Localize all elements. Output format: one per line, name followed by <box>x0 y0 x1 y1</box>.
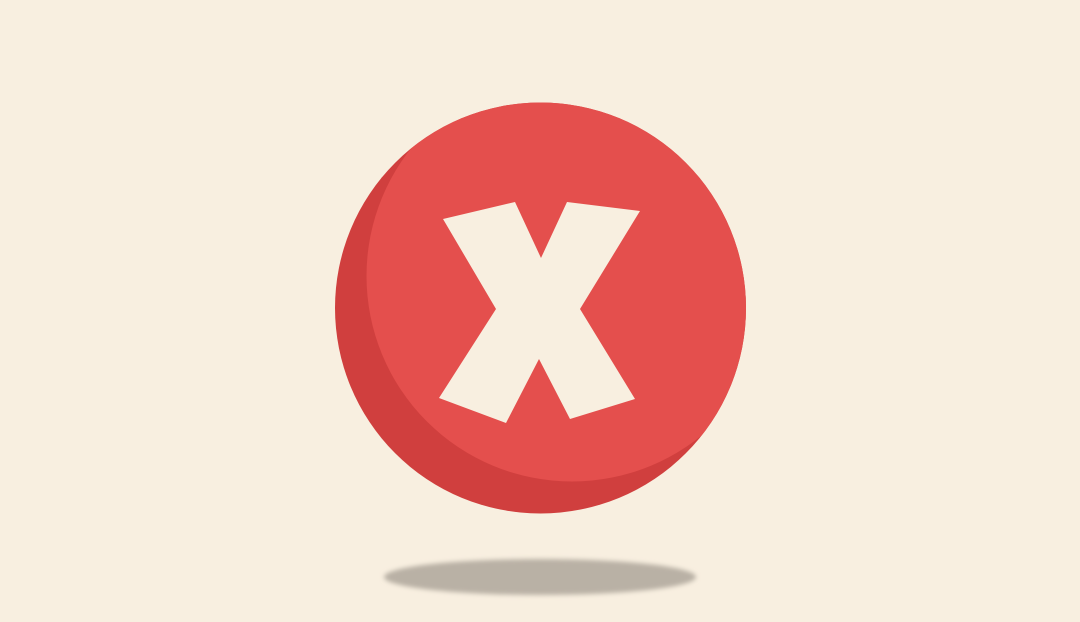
icon: X mark <box>439 202 640 423</box>
illustration: red X button with shadow <box>335 102 746 598</box>
icon: red circle button <box>335 102 746 514</box>
icon: ground shadow <box>384 559 696 595</box>
